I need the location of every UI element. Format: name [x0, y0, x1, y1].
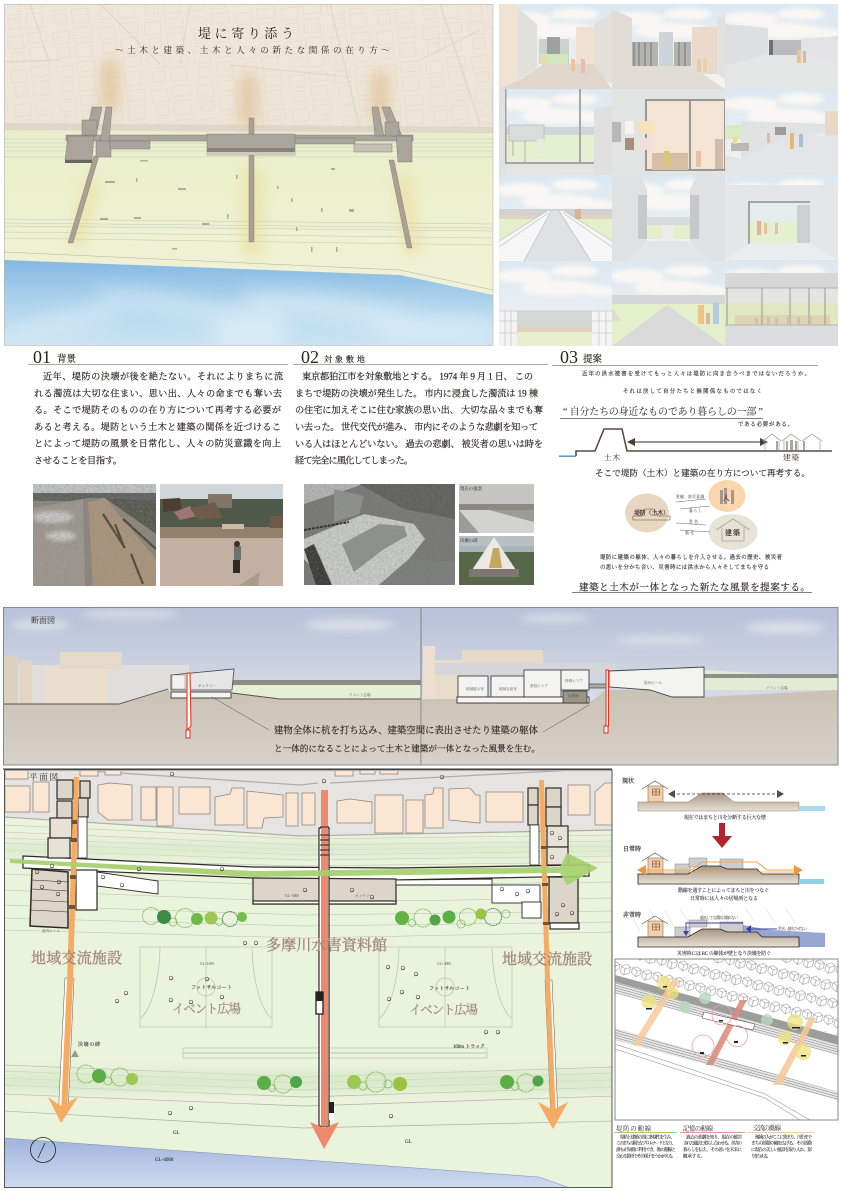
plan: facility labels: ギャラリー	[355, 893, 373, 898]
diagram: relation of embankment, people and architecture: 風化	[685, 530, 694, 535]
scenario: everyday: 日常時	[623, 845, 641, 853]
scenario: everyday	[623, 845, 824, 902]
photo: memorial monument	[459, 536, 534, 585]
proposal intro text: それは決して自分たちと無関係なものではなく	[623, 387, 762, 395]
diagram: relation of embankment, people and architecture: 人	[723, 493, 730, 502]
heading 03	[560, 347, 602, 367]
photo: flooded town with child	[160, 484, 283, 586]
heading 01: 01	[33, 347, 51, 367]
axonometric view	[615, 959, 838, 1120]
plan: facility labels: イベント広場	[409, 1002, 478, 1017]
proposal explanation	[600, 553, 783, 571]
diagram: embankment and architecture separated: 建築	[783, 452, 799, 462]
body text 02: 経て完全に風化してしまった。	[295, 454, 413, 466]
plan panel	[3, 768, 614, 1190]
note: embankment circulation	[614, 1124, 677, 1160]
section explanation: 建物全体に杭を打ち込み、建築空間に表出させたり建築の躯体	[274, 724, 539, 736]
plan: facility labels: フットサルコート	[429, 986, 470, 992]
subtitle: ～土木と建築、土木と人々の新たな関係の在り方～	[115, 44, 390, 55]
scenario: emergency: 洪水、越水させない	[778, 926, 807, 931]
plan: facility labels: GL+1000	[200, 962, 214, 966]
photo: aerial map of flood site	[304, 484, 455, 585]
right section drawing: 地域展示室	[466, 686, 484, 691]
right section drawing: 地域交流室	[499, 686, 517, 691]
perspective 9	[725, 175, 838, 261]
diagram: embankment and architecture separated	[559, 429, 832, 462]
note: embankment circulation: 堤防と建築の間に多様性を生み、	[620, 1134, 675, 1140]
photo: present scenery	[459, 484, 534, 533]
scenario: current state: 現状	[622, 777, 634, 785]
statement: reconsider: そこで堤防（土木）と建築の在り方について再考する。	[595, 467, 810, 478]
body text 01: あると考える。堤防という土木と建築の関係を近づけるこ	[34, 421, 281, 432]
panel label: 断面図	[31, 615, 55, 625]
note: embankment circulation: このまちの新たなプロムナードとなり、	[616, 1140, 676, 1146]
body text 02: の住宅に加えそこに住む家族の思い出、 大切な品々までも奪	[295, 404, 543, 415]
plan: river	[4, 1138, 570, 1188]
plan frame	[4, 770, 612, 1188]
body text 01: れる濁流は大切な住まい、思い出、人々の命までも奪い去	[34, 388, 282, 398]
perspective 8	[612, 175, 725, 261]
plan: facility labels: フットサルコート	[191, 985, 232, 991]
perspective 12	[725, 261, 838, 346]
body text 02: いる人はほとんどいない。 過去の悲劇、 被災者の思いは時を	[295, 438, 543, 449]
scenario: everyday: 日常時には人々の居場所となる	[690, 895, 758, 902]
note: memory circulation: 継承する。	[683, 1152, 705, 1160]
plan: facility labels: 地域交流施設	[502, 950, 592, 968]
north compass	[30, 1138, 56, 1162]
heading 02: 対象敷地	[324, 354, 365, 364]
section explanation	[274, 724, 540, 754]
photo: memorial monument: 決壊の碑	[460, 537, 478, 544]
plan: facility labels: 地域交流施設	[31, 949, 122, 967]
section panel	[3, 607, 838, 765]
diagram: embankment and architecture separated: 土木	[604, 452, 620, 462]
note: memory circulation: 記憶の動線	[683, 1124, 714, 1132]
body text 01	[34, 370, 283, 466]
section 01: background	[28, 347, 288, 586]
perspective 11	[612, 261, 725, 346]
note: memory circulation: 過去の悲劇を知り、現在の被害	[686, 1134, 742, 1140]
perspective 5	[612, 89, 725, 175]
right section drawing: 屋内ホール	[644, 680, 662, 685]
diagram: relation of embankment, people and architecture: 暮らし	[689, 508, 702, 513]
plan: green promenade arrow	[10, 853, 598, 885]
plan: futsal courts	[140, 947, 512, 1058]
plan: embankment contour lines	[4, 825, 614, 1128]
conclusion statement: 建築と土木が一体となった新たな風景を提案する。	[579, 582, 810, 594]
note: exchange circulation: りを与える。	[751, 1152, 771, 1160]
plan: piers	[48, 777, 568, 1149]
scenario: emergency	[623, 908, 825, 957]
plan: facility labels: 100m トラック	[453, 1044, 485, 1050]
left section drawing	[4, 652, 421, 765]
plan: trees	[77, 908, 544, 1093]
left section drawing: イベント広場	[349, 692, 371, 697]
note: embankment circulation: 交わる箇所でその様子をうかがえる。	[616, 1152, 676, 1160]
plan: road and houses	[4, 768, 612, 836]
body text 02	[295, 370, 543, 466]
body text 01: 近年、堤防の決壊が後を絶たない。それによりまちに流	[43, 370, 283, 382]
note: exchange circulation: 交流の動線	[753, 1123, 782, 1132]
perspective 3	[725, 4, 838, 89]
note: memory circulation: 暮らしを伝え、その思いを未来に	[683, 1146, 742, 1153]
body text 01: る。そこで堤防そのものの在り方について再考する必要が	[34, 404, 281, 415]
body text 01: とによって堤防の風景を日常化し、人々の防災意識を向上	[34, 438, 281, 448]
right section drawing: 常設エリア	[530, 683, 548, 688]
circulation notes	[614, 1123, 814, 1160]
note: exchange circulation: まちの活動の輪を広げる。その活動	[751, 1140, 812, 1146]
scenario: current state	[622, 777, 825, 821]
photo: present scenery: 現在の風景	[460, 485, 483, 492]
body text 02: 東京都狛江市を対象敷地とする。 1974 年 9 月 1 日、 この	[302, 370, 533, 382]
heading 03: 03	[560, 347, 578, 367]
plan: people and furniture	[35, 772, 574, 1118]
monument marker	[71, 1050, 79, 1057]
proposal explanation: 堤防に建築の躯体、人々の暮らしを介入させる。過去の歴史、被災者	[600, 553, 783, 561]
title: 堤に寄り添う	[198, 26, 294, 41]
perspective 10	[499, 261, 612, 346]
plan: facility labels: 決壊の碑	[78, 1041, 100, 1048]
heading 02: 02	[301, 347, 319, 367]
section 03: proposal	[552, 347, 832, 594]
body text 02: まちで堤防の決壊が発生した。 市内に浸食した濁流は 19 棟	[295, 388, 538, 398]
diagram: relation of embankment, people and architecture: 景観、防災意識	[676, 494, 704, 499]
heading 01	[33, 347, 77, 367]
diagram: relation of embankment, people and architecture: 堤防（土木）	[634, 509, 669, 517]
perspective 4	[499, 89, 612, 175]
plan: main walkway and buildings	[23, 780, 589, 1126]
plan: facility labels	[31, 893, 592, 1163]
leader lines	[212, 697, 589, 732]
right section drawing: イベント広場	[766, 685, 788, 690]
plan: facility labels: イベント広場	[172, 1001, 241, 1016]
note: embankment circulation: 堤防の動線	[616, 1124, 652, 1132]
perspective sketch grid	[496, 4, 842, 347]
plan: facility labels: GL	[173, 1131, 180, 1136]
note: exchange circulation: に現在の美しい風景を取り入れ、彩	[751, 1146, 812, 1153]
diagram: relation of embankment, people and architecture	[625, 480, 758, 550]
scenario: everyday: 動線を通すことによってまちと川をつなぐ	[678, 887, 769, 894]
heading 03: 提案	[583, 353, 602, 365]
perspective 1	[499, 4, 612, 89]
heading 01: 背景	[57, 353, 77, 365]
photo: flooded plain aerial	[33, 484, 156, 586]
note: embankment circulation: 誰もが気軽に利用でき、他の動線と	[616, 1146, 676, 1153]
body text 02: い去った。 世代交代が進み、 市内にそのような悲劇を知って	[295, 421, 538, 432]
note: exchange circulation	[748, 1123, 814, 1160]
right section drawing: 特別エリア	[565, 678, 583, 683]
note: exchange circulation: 地域の人がここに集まり、川沿まで	[755, 1134, 812, 1140]
left section drawing: ギャラリー	[198, 683, 216, 688]
perspective 7	[499, 175, 612, 261]
proposal intro text: 近年の洪水被害を受けてもっと人々は堤防に向き合うべきではないだろうか。	[582, 370, 810, 378]
section explanation: と一体的になることによって土木と建築が一体となった風景を生む。	[274, 742, 540, 754]
plan label: 平面図	[29, 773, 58, 782]
perspective 6	[725, 89, 838, 175]
body text 01: させることを目指す。	[34, 454, 122, 466]
plan: facility labels: GL+5000	[285, 894, 299, 898]
scenario: emergency: 災害時には RC の躯体が壁となり決壊を防ぐ	[677, 950, 771, 957]
scenario: current state: 現在ではまちと川を分断する巨大な壁	[684, 814, 766, 821]
right section drawing	[422, 646, 838, 765]
key quote: “ 自分たちの身近なものであり暮らしの一部 ”	[563, 405, 763, 418]
diagram: relation of embankment, people and architecture: 建築	[725, 528, 740, 537]
proposal explanation: の思いを分かち合い、災害時には洪水から人々そしてまちを守る	[600, 563, 769, 571]
plan: facility labels: GL+3000	[437, 962, 451, 966]
section 02: target site	[293, 347, 548, 585]
hero: aerial rendering of the embankment	[0, 4, 510, 354]
proposal intro text	[582, 370, 810, 395]
plan: facility labels: 屋内ホール	[42, 928, 60, 933]
text: need: である必要がある。	[738, 420, 793, 428]
arrow: red down	[712, 823, 732, 848]
scenario: emergency: 非常時	[623, 911, 641, 919]
plan: facility labels: 多摩川水害資料館	[266, 936, 387, 954]
heading 02	[301, 347, 365, 367]
right section drawing: 収蔵庫	[568, 693, 579, 698]
perspective 2	[612, 4, 725, 89]
diagram: relation of embankment, people and architecture: 景色	[689, 519, 698, 524]
note: memory circulation	[680, 1124, 745, 1160]
plan: facility labels: GL-4000	[155, 1158, 174, 1163]
plan: facility labels: GL	[405, 1140, 412, 1145]
note: memory circulation: された風景と照らし合わせる。水害の	[683, 1140, 742, 1146]
scenario: emergency: 越水しても堤防は壊れない	[700, 915, 738, 920]
scenario diagrams	[622, 777, 825, 957]
